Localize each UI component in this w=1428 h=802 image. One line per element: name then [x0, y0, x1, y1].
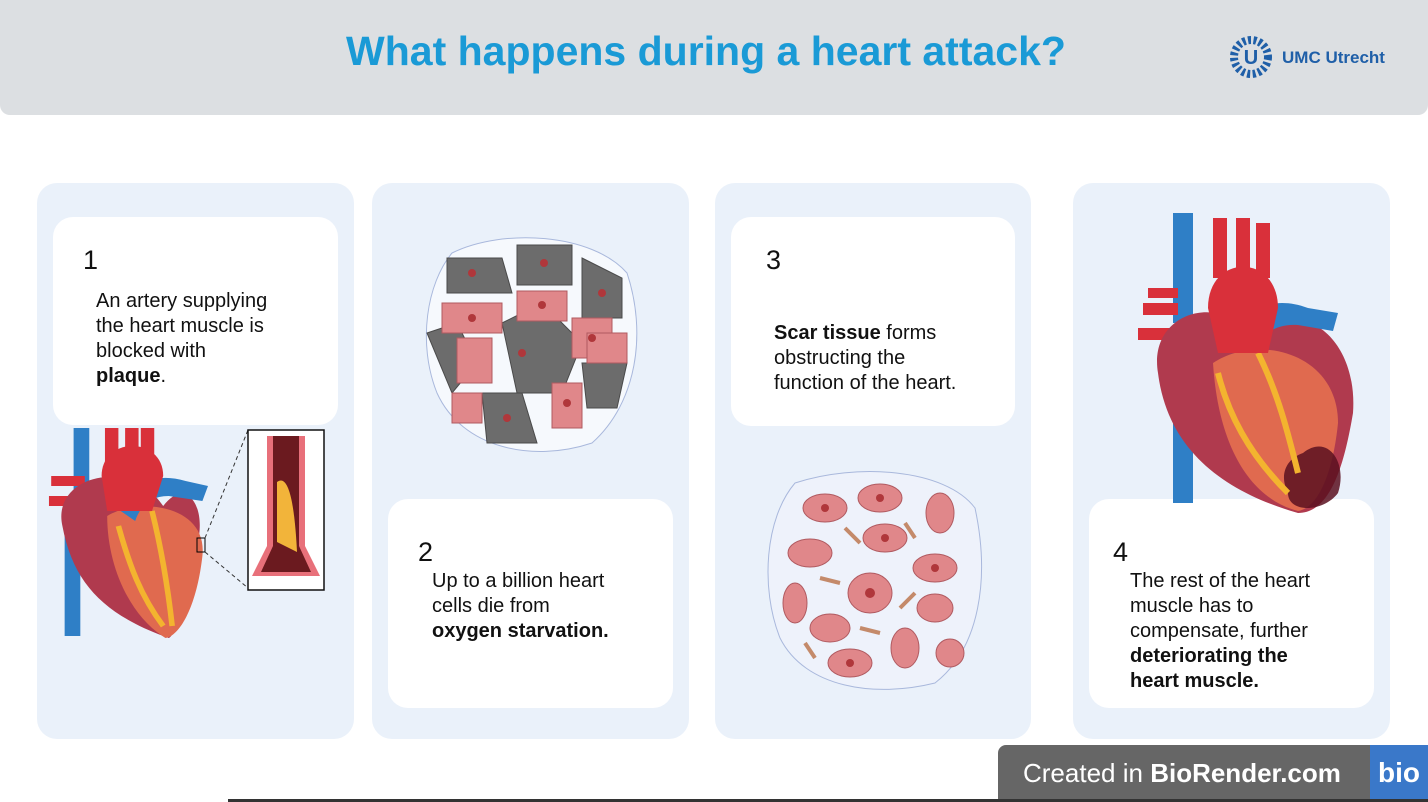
card 4: muscle has to [1130, 595, 1253, 617]
icon: dying heart cells [426, 237, 638, 452]
card 3: function of the heart. [774, 372, 956, 394]
panel 1 [37, 183, 354, 739]
card 1: 1 [83, 245, 98, 275]
card 1: the heart muscle is [96, 315, 264, 337]
card 4: compensate, further [1130, 620, 1308, 642]
card 2: 2 [418, 537, 433, 567]
logo: UMC Utrecht: UMC Utrecht [1282, 48, 1385, 67]
card 3: 3 [766, 245, 781, 275]
card 4: deteriorating the [1130, 645, 1288, 667]
card 3: Scar tissue forms [774, 322, 936, 344]
card 1 [53, 217, 338, 425]
panel 4 [1073, 183, 1390, 739]
title: What happens during a heart attack? [346, 28, 1066, 74]
card 4 [1089, 499, 1374, 708]
card 4: The rest of the heart [1130, 570, 1310, 592]
icon: heart with blocked artery [48, 428, 325, 638]
BioRender badge: bio [1378, 757, 1420, 788]
panel 2 [372, 183, 689, 739]
card 3 [731, 217, 1015, 426]
BioRender badge: Created in BioRender.com [1023, 758, 1341, 788]
logo: UMC Utrecht: U [1244, 47, 1258, 69]
BioRender badge [998, 745, 1428, 800]
icon: damaged heart [1138, 213, 1354, 513]
card 2 [388, 499, 673, 708]
card 2: cells die from [432, 595, 550, 617]
logo: UMC Utrecht [1230, 36, 1385, 78]
card 4: heart muscle. [1130, 670, 1259, 692]
card 1: blocked with [96, 340, 206, 362]
icon: scar tissue [768, 471, 982, 690]
card 3: obstructing the [774, 347, 905, 369]
card 2: oxygen starvation. [432, 620, 609, 642]
card 1: plaque. [96, 365, 166, 387]
card 1: An artery supplying [96, 290, 267, 312]
card 4: 4 [1113, 537, 1128, 567]
header band [0, 0, 1428, 115]
panel 3 [715, 183, 1031, 739]
card 2: Up to a billion heart [432, 570, 604, 592]
